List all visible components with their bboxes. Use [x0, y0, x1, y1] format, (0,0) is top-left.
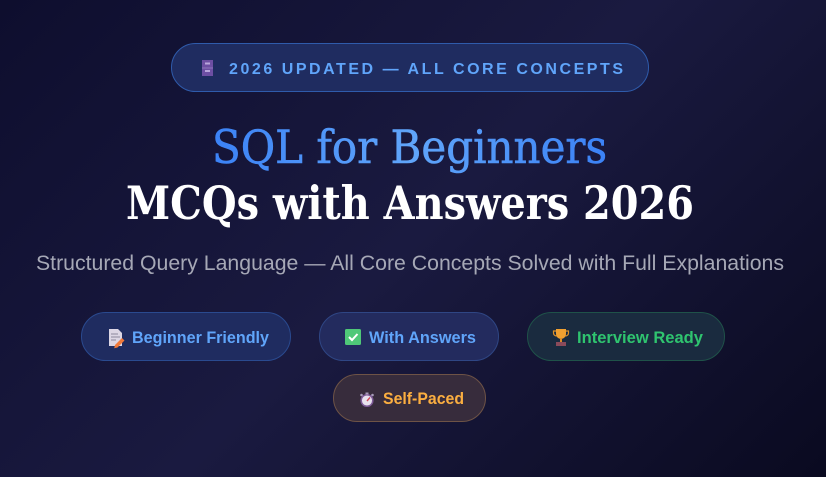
title line two: MCQs with Answers 2026: [126, 176, 694, 230]
title line one: SQL for Beginners: [212, 120, 607, 174]
pill: interview ready: [528, 312, 724, 360]
icon: file cabinet: [202, 60, 213, 76]
icon: memo: [109, 329, 124, 348]
top badge: [172, 44, 648, 92]
icon: check mark: [345, 329, 361, 345]
pill: beginner friendly: [82, 312, 290, 360]
title: [126, 120, 694, 230]
pill: with answers: [320, 312, 498, 360]
icon: stopwatch: [360, 392, 374, 406]
pill: self-paced: [334, 374, 486, 422]
pill text: Interview Ready: [577, 328, 704, 347]
badge text: 2026 UPDATED — ALL CORE CONCEPTS: [229, 61, 623, 78]
pill text: Self-Paced: [383, 389, 464, 408]
pill text: Beginner Friendly: [132, 328, 270, 347]
pill text: With Answers: [369, 328, 476, 347]
subtitle: Structured Query Language — All Core Concepts Solved with Full Explanations: [36, 251, 784, 275]
icon: trophy: [554, 329, 568, 346]
